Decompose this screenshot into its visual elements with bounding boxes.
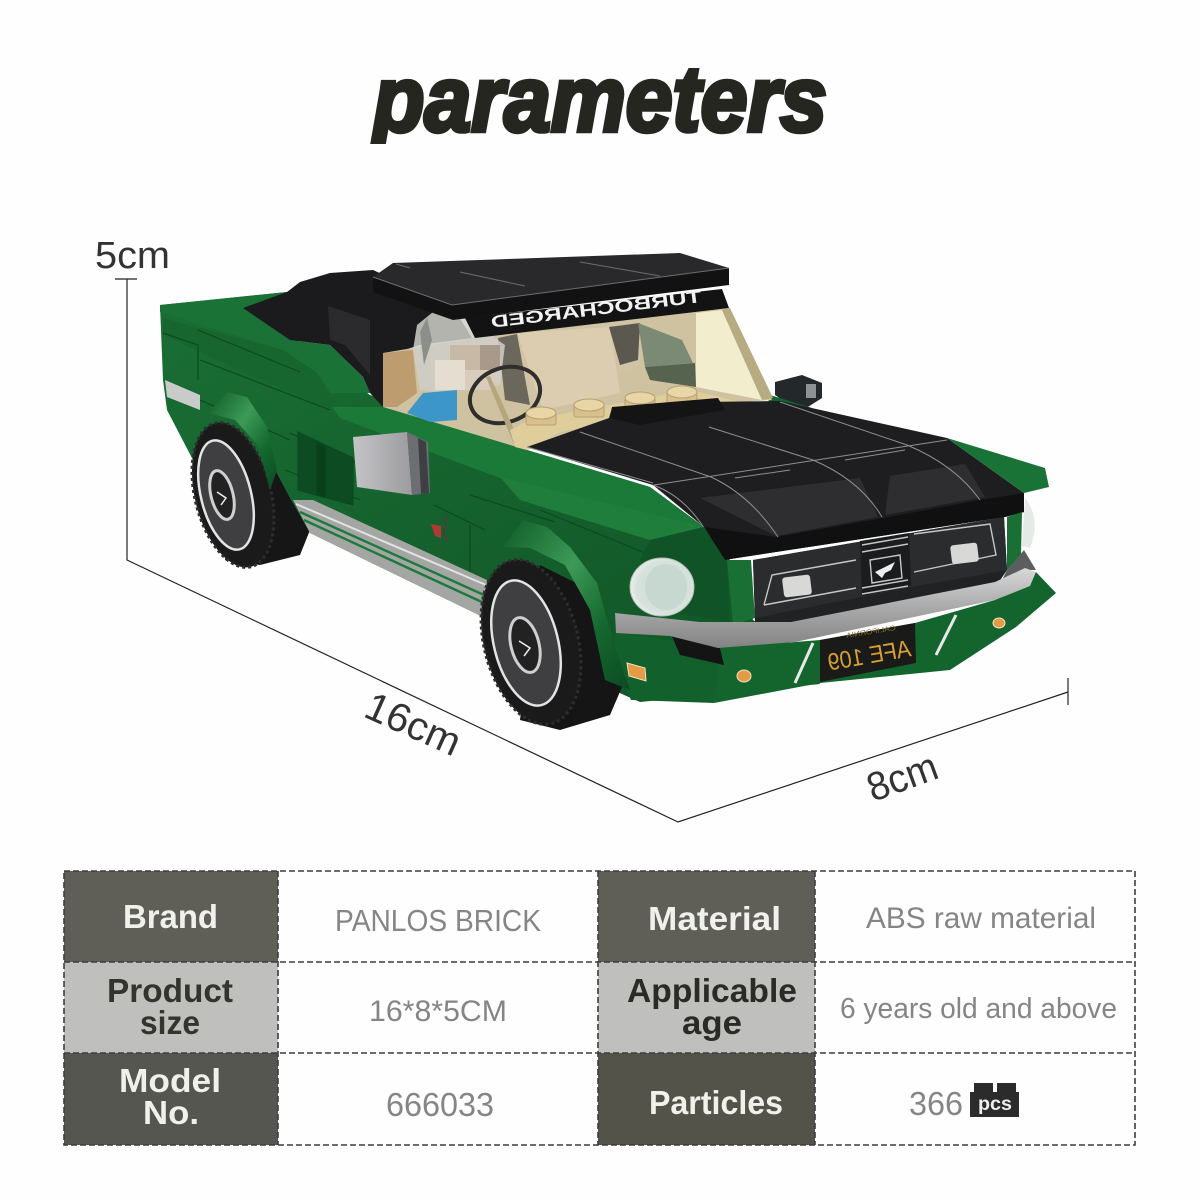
windshield banner: TURBOCHARGED xyxy=(490,287,702,332)
height label: 5cm xyxy=(95,235,170,277)
windshield banner xyxy=(465,287,729,338)
rear fender xyxy=(208,392,277,490)
driver helmet xyxy=(413,312,505,392)
cell: Applicable age: age xyxy=(682,1004,742,1041)
windshield pillar xyxy=(486,376,522,447)
driver torso xyxy=(407,390,457,422)
far side fender xyxy=(947,438,1049,493)
green beltline xyxy=(332,407,704,538)
value: model number: 666033 xyxy=(386,1086,494,1123)
value: brand: PANLOS BRICK xyxy=(335,903,541,938)
side sill chrome xyxy=(293,500,487,617)
value: particles count: 366 xyxy=(909,1085,963,1122)
door emblem xyxy=(431,516,448,542)
far headlight xyxy=(1022,497,1035,548)
hood xyxy=(527,398,1024,560)
cell: Product size: size xyxy=(140,1004,200,1041)
cell: Model No.: Model xyxy=(119,1062,221,1099)
front wheel xyxy=(465,549,625,735)
car body side xyxy=(160,292,820,702)
dashboard studs xyxy=(526,386,697,425)
cabin interior xyxy=(383,308,773,450)
specification table xyxy=(64,871,1135,1145)
far side mirror xyxy=(765,375,822,425)
width label: 8cm xyxy=(861,744,944,810)
near headlight xyxy=(630,558,694,616)
cell: Brand: Brand xyxy=(123,898,218,935)
rear wheel back tyre xyxy=(225,430,310,565)
cell: Model No. xyxy=(119,1062,221,1131)
seat xyxy=(383,350,417,407)
roof xyxy=(373,253,729,320)
rear wheel xyxy=(178,414,288,576)
front lower bumper green xyxy=(612,572,1056,703)
grille xyxy=(753,517,1007,628)
cell: Applicable age xyxy=(627,972,797,1041)
table dashed grid xyxy=(64,871,1135,1145)
chrome bumper xyxy=(615,550,1036,648)
dashboard plate xyxy=(510,390,740,450)
turn signal lights xyxy=(627,618,1005,682)
rear quarter window xyxy=(328,306,370,375)
cell: Product size xyxy=(107,972,233,1041)
driver face (pixelated) xyxy=(435,345,500,390)
near side mirror xyxy=(353,432,430,495)
header cells xyxy=(64,871,815,1145)
length label: 16cm xyxy=(358,684,468,765)
rear silver stripe xyxy=(165,380,200,410)
front green flank xyxy=(500,477,1022,625)
value: applicable age: 6 years old and above xyxy=(840,993,1117,1025)
title: parameters xyxy=(370,47,827,151)
icon: pcs brick xyxy=(970,1083,1019,1117)
cell: Material: Material xyxy=(648,900,781,937)
front fender xyxy=(503,520,630,690)
dimension lines xyxy=(115,279,1068,822)
rear deck xyxy=(160,292,370,393)
cabin rear black xyxy=(243,270,472,407)
licence plate: CALIFORNIA xyxy=(845,625,896,640)
body panel lines xyxy=(163,330,650,575)
icon: pcs brick: pcs xyxy=(978,1094,1012,1115)
cell: Particles: Particles xyxy=(649,1084,783,1121)
cell: Product size: Product xyxy=(107,972,233,1009)
value: material: ABS raw material xyxy=(866,902,1096,935)
cell: Model No.: No. xyxy=(143,1094,199,1131)
grille lamps and pony xyxy=(782,574,812,598)
car: green Mustang brick model xyxy=(160,253,1056,735)
cell: Applicable age: Applicable xyxy=(627,972,797,1009)
steering wheel xyxy=(462,357,548,433)
value: product size: 16*8*5CM xyxy=(369,995,507,1028)
licence plate: AFE 109 xyxy=(826,635,913,676)
licence plate xyxy=(820,623,916,682)
